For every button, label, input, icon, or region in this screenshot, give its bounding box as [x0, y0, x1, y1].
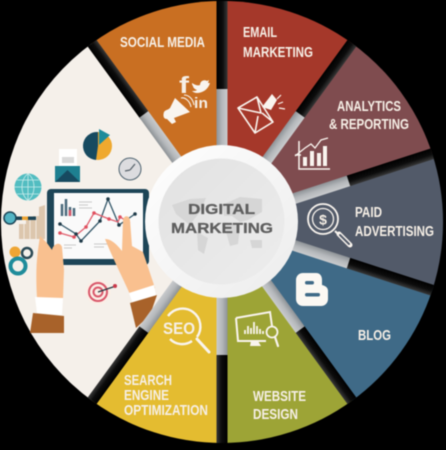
panel: tablet illustration [1, 43, 222, 401]
panel: paid advertising [222, 154, 443, 290]
heading: analytics and reporting [329, 98, 409, 133]
heading: analytics and reporting: ANALYTICS [337, 98, 401, 115]
icon: seo magnifier: SEO [163, 319, 195, 338]
center disc [145, 145, 298, 298]
panel: blog [222, 222, 432, 401]
icon: seo magnifier [163, 309, 209, 352]
center title: DIGITAL [188, 201, 255, 218]
heading: paid advertising: PAID [355, 204, 382, 221]
icon: social megaphone [163, 72, 210, 124]
icon: social megaphone: in [194, 95, 208, 112]
left hand [30, 236, 64, 333]
center title [171, 201, 273, 237]
icon: globe [14, 174, 42, 200]
icon: monitor and magnifier [236, 312, 278, 346]
tablet [47, 189, 149, 265]
panel: email marketing [222, 1, 352, 222]
heading: social media: SOCIAL MEDIA [120, 34, 205, 51]
panel: website design [222, 222, 352, 443]
icon: bars and magnifier [4, 205, 45, 239]
heading: analytics and reporting: & REPORTING [329, 116, 409, 133]
heading: search engine optimization [124, 372, 208, 419]
panel: social media [92, 1, 222, 222]
heading: blog: BLOG [358, 327, 391, 344]
heading: search engine optimization: SEARCH [124, 372, 172, 389]
heading: email marketing: EMAIL [243, 24, 277, 41]
faint world map [172, 197, 262, 254]
heading: email marketing [243, 24, 313, 61]
heading: website design [253, 388, 306, 423]
icon: envelope and megaphone [238, 94, 285, 133]
heading: website design: DESIGN [253, 406, 298, 423]
icon: target [86, 280, 117, 304]
icon: envelope with letter [55, 149, 80, 182]
icon: growth chart [295, 138, 330, 169]
icon: pie chart [83, 129, 112, 160]
heading: paid advertising [355, 204, 434, 240]
icon: gears [10, 246, 32, 274]
icon: dollar magnifier: $ [319, 212, 327, 228]
icon: clock [119, 158, 141, 180]
heading: website design: WEBSITE [253, 388, 306, 405]
icon: blogger [296, 273, 328, 306]
icon: dollar magnifier [308, 204, 350, 245]
icon: social megaphone: f [179, 72, 189, 98]
heading: search engine optimization: OPTIMIZATION [124, 402, 208, 419]
heading: email marketing: MARKETING [243, 44, 313, 61]
heading: search engine optimization: ENGINE [124, 387, 169, 404]
right hand [105, 216, 157, 328]
center title: MARKETING [171, 220, 273, 237]
panel: search engine optimization [92, 222, 222, 443]
chart lines [60, 199, 135, 241]
panel: analytics and reporting [222, 43, 432, 222]
spokes [88, 1, 434, 443]
